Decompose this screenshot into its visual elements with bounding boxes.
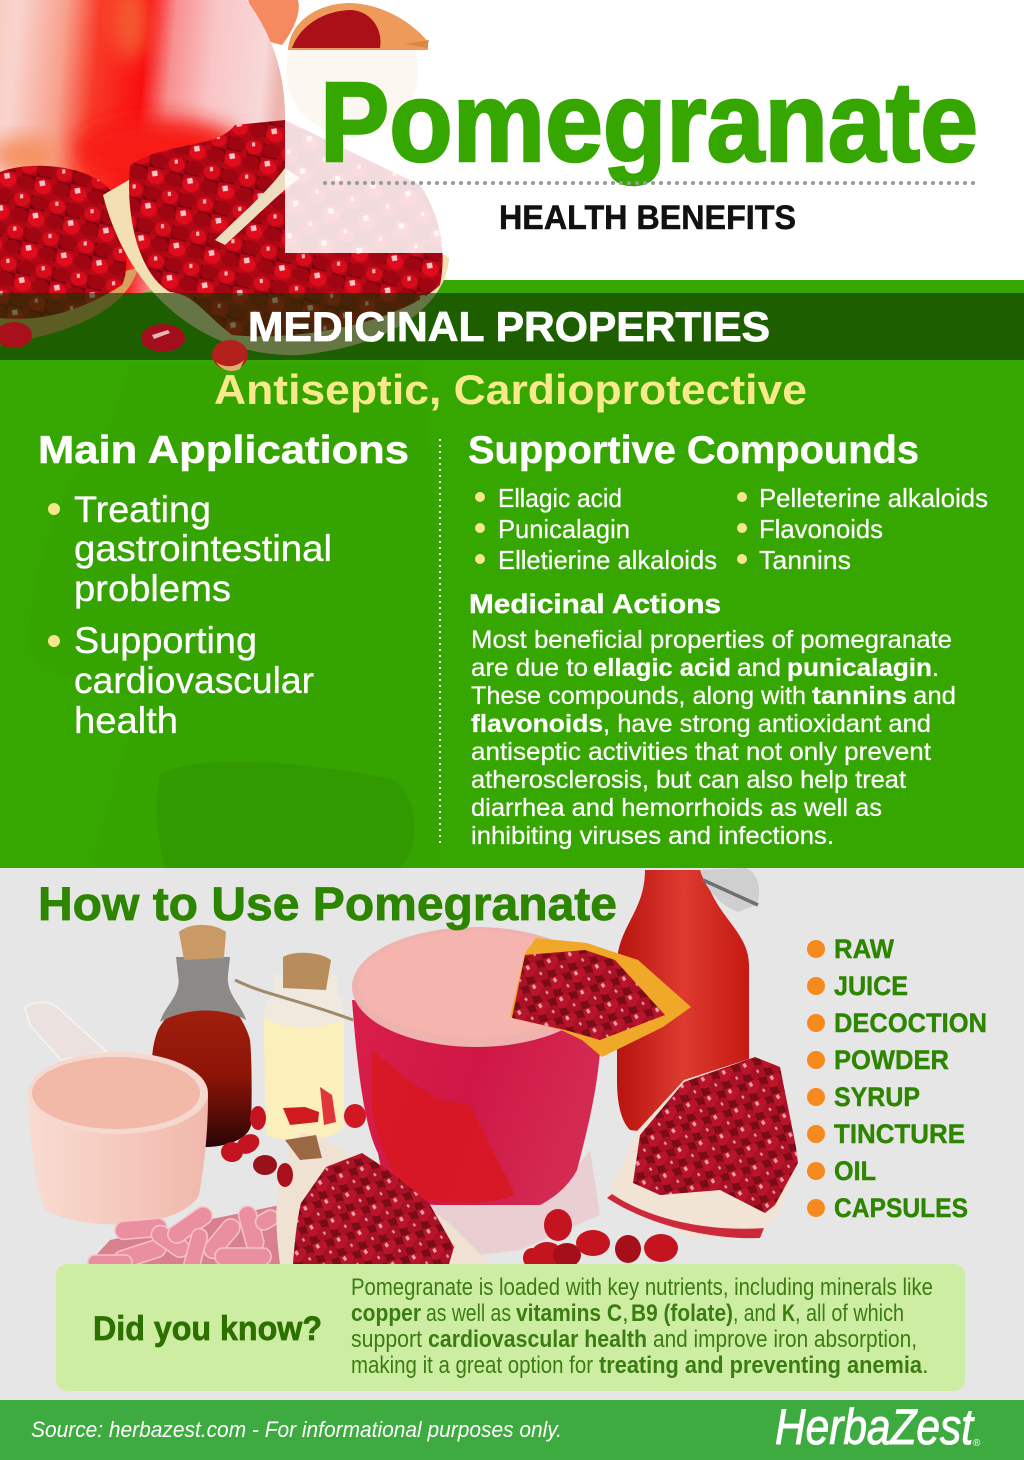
text block: nutrient fact: and improve iron absorption, [653, 1326, 917, 1353]
dark tincture bottle [152, 925, 252, 1147]
text block: medicinal actions: diarrhea and hemorrhoids as well as [471, 794, 882, 822]
list: preparation forms: RAW [834, 934, 894, 964]
glass of pomegranate juice [352, 927, 602, 1255]
text block: nutrient fact: , all of which [795, 1300, 904, 1327]
large whole pomegranate [0, 0, 290, 300]
capsules [87, 1206, 280, 1264]
illustration: pomegranates header photo [0, 0, 449, 355]
heading: supportive compounds: Supportive Compounds [468, 429, 919, 472]
cut pomegranate behind title [286, 3, 429, 136]
list: compounds [475, 483, 988, 575]
text block: medicinal actions [471, 626, 956, 850]
text block: medicinal actions: tannins [812, 682, 907, 710]
text block: medicinal actions: are due to [471, 654, 588, 682]
list: preparation forms: DECOCTION [834, 1008, 987, 1038]
text block: medicinal actions: flavonoids [471, 710, 603, 738]
band: medicinal properties [0, 293, 1024, 360]
text block: medicinal actions: Most beneficial properties of pomegranate [471, 626, 952, 654]
text block: nutrient fact: as well as [426, 1300, 511, 1327]
text block: nutrient fact: copper [351, 1300, 421, 1327]
subtitle: HEALTH BENEFITS [499, 199, 796, 237]
front cut pomegranate [276, 1133, 490, 1264]
title: Pomegranate [320, 59, 978, 185]
panel: how to use background [0, 868, 1024, 1400]
list: preparation forms: TINCTURE [834, 1119, 965, 1149]
oil vial [235, 953, 366, 1140]
bullet: treating gastrointestinal problems: Treating [74, 489, 211, 530]
text block: nutrient fact: Pomegranate is loaded with key nutrients, including minerals like [351, 1274, 933, 1301]
red juice bottle [617, 868, 759, 1131]
text block: nutrient fact: treating and preventing anemia [599, 1352, 923, 1379]
source note: Source: herbazest.com - For informational purposes only. [31, 1417, 562, 1442]
logo: HerbaZest: HerbaZest [775, 1399, 975, 1455]
text block: medicinal actions: ellagic acid [593, 654, 731, 682]
text block: medicinal actions: . [932, 654, 939, 682]
list: compounds: Punicalagin [498, 514, 630, 544]
bullet: treating gastrointestinal problems: problems [74, 568, 231, 609]
left half pomegranate [0, 166, 138, 345]
text block: nutrient fact: cardiovascular health [428, 1326, 647, 1353]
panel: main applications [38, 429, 409, 741]
list: preparation forms: CAPSULES [834, 1193, 968, 1223]
bullet: supporting cardiovascular health: cardiovascular [74, 660, 314, 701]
bullet: treating gastrointestinal problems [48, 489, 332, 609]
text block: medicinal actions: antiseptic activities that not only prevent [471, 738, 931, 766]
illustration: pomegranate products [25, 868, 798, 1279]
text block: nutrient fact: , and [733, 1300, 776, 1327]
bullet: treating gastrointestinal problems: gastrointestinal [74, 528, 332, 569]
powder scoop [25, 1002, 208, 1224]
title panel: translucent white [285, 50, 445, 253]
text block: nutrient fact [351, 1274, 933, 1379]
heading: medicinal actions: Medicinal Actions [469, 589, 721, 619]
text block: medicinal actions: atherosclerosis, but can also help treat [471, 766, 906, 794]
bullet: supporting cardiovascular health [48, 620, 314, 741]
panel: medicinal properties background [0, 280, 1024, 869]
footer [0, 1399, 1024, 1460]
list: compounds: Elletierine alkaloids [498, 545, 717, 575]
text block: medicinal actions: and [913, 682, 956, 710]
bullet: supporting cardiovascular health: Supporting [74, 620, 257, 661]
list: compounds: Flavonoids [759, 514, 883, 544]
text block: medicinal actions: inhibiting viruses and infections. [471, 822, 834, 850]
heading: main applications: Main Applications [38, 429, 409, 472]
registered mark: ® [973, 1438, 981, 1449]
heading: how to use: How to Use Pomegranate [38, 877, 617, 930]
center cut pomegranate [103, 120, 449, 355]
list: preparation forms: JUICE [834, 971, 908, 1001]
list: compounds: Ellagic acid [498, 483, 622, 513]
illustration: torso and intestines silhouette [28, 365, 440, 868]
list: preparation forms [807, 934, 987, 1223]
list: preparation forms: SYRUP [834, 1082, 920, 1112]
subheading: properties list: Antiseptic, Cardioprotective [214, 366, 807, 413]
heading: did you know: Did you know? [93, 1310, 322, 1348]
text block: nutrient fact: . [922, 1352, 929, 1379]
list: preparation forms: POWDER [834, 1045, 949, 1075]
text block: nutrient fact: K [782, 1300, 795, 1327]
pomegranate wedge right [607, 1057, 798, 1238]
back pomegranate [248, 0, 299, 45]
text block: nutrient fact: making it a great option for [351, 1352, 593, 1379]
panel: supportive compounds [468, 429, 988, 850]
divider: dotted title rule [325, 181, 976, 185]
list: compounds: Tannins [759, 545, 851, 575]
text block: medicinal actions: , have strong antioxidant and [603, 710, 931, 738]
text block: medicinal actions: and [737, 654, 781, 682]
text block: medicinal actions: These compounds, along with [471, 682, 806, 710]
icons: fallen pomegranate seeds [0, 322, 248, 371]
bullet: supporting cardiovascular health: health [74, 700, 178, 741]
text block: nutrient fact: B9 (folate) [631, 1300, 733, 1327]
text block: medicinal actions: punicalagin [787, 654, 932, 682]
text block: nutrient fact: , [622, 1300, 629, 1327]
text block: nutrient fact: support [351, 1326, 422, 1353]
heading: medicinal properties: MEDICINAL PROPERTIES [248, 303, 770, 350]
list: preparation forms: OIL [834, 1156, 876, 1186]
loose pomegranate seeds [221, 1130, 678, 1268]
list: compounds: Pelleterine alkaloids [759, 483, 988, 513]
panel: did you know [56, 1264, 965, 1391]
pomegranate slice on glass rim [510, 938, 691, 1057]
text block: nutrient fact: vitamins C [516, 1300, 622, 1327]
